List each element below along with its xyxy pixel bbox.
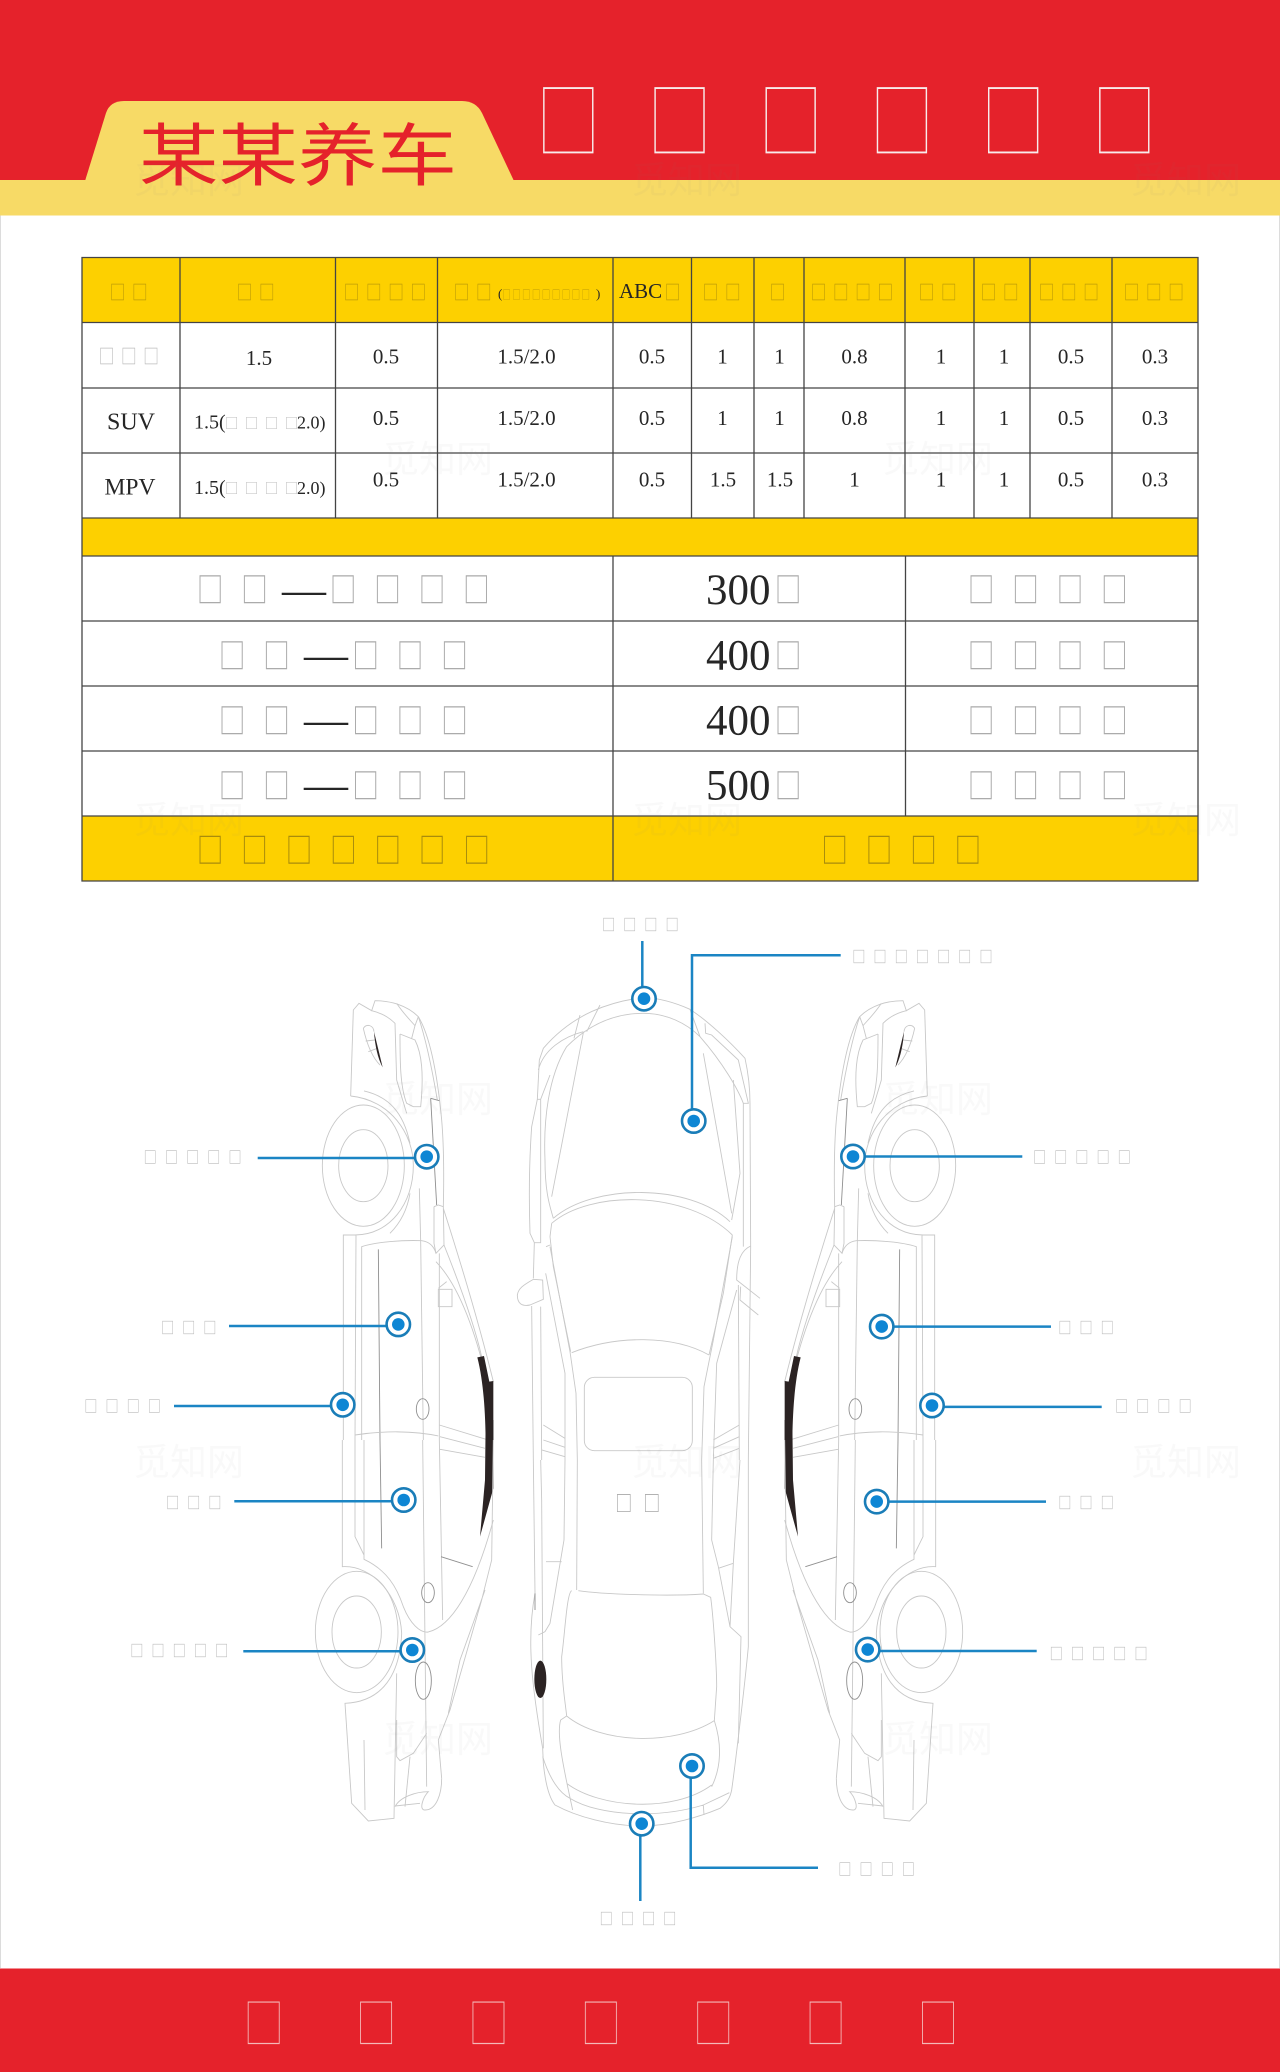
package row 2: 400 bbox=[706, 632, 770, 679]
callout: rear bumper bbox=[600, 1812, 684, 1930]
callout: hood bbox=[682, 945, 1001, 1133]
table row: sedan: 0.5 bbox=[373, 344, 399, 368]
header band bbox=[0, 0, 1280, 216]
footer slogan: □□□□□□□ bbox=[243, 1981, 1030, 2059]
callout: left front fender: □□□□□ bbox=[144, 1146, 250, 1169]
table row: SUV: 1 bbox=[999, 406, 1009, 430]
table footer row bbox=[197, 823, 999, 873]
table header row: □ bbox=[770, 277, 792, 306]
watermarks: 觅知网 bbox=[382, 439, 493, 480]
title: 某某养车 bbox=[139, 119, 457, 195]
table row: MPV: 0.5 bbox=[639, 468, 665, 492]
package row 3: □□□ bbox=[352, 693, 486, 743]
callout: right front door bbox=[870, 1315, 1122, 1339]
package row 2: □□ bbox=[219, 628, 308, 678]
table row: sedan: □□□ bbox=[99, 341, 166, 370]
watermarks: 觅知网 bbox=[133, 800, 244, 841]
table header row bbox=[110, 277, 1191, 306]
watermarks: 觅知网 bbox=[631, 160, 742, 201]
car centre label: □□ bbox=[615, 1486, 671, 1518]
callout: right rear door: □□□ bbox=[1058, 1491, 1122, 1514]
package row 3: — bbox=[303, 695, 349, 744]
table row: MPV: 1.5( bbox=[194, 477, 226, 499]
table header row: □□ bbox=[919, 277, 963, 306]
package row 1: □ bbox=[775, 562, 819, 613]
table row: MPV: 0.5 bbox=[1058, 468, 1084, 492]
watermarks: 觅知网 bbox=[382, 1719, 493, 1760]
package row 3: □ bbox=[775, 693, 819, 743]
package row 4: □□□□ bbox=[968, 758, 1146, 808]
watermarks: 觅知网 bbox=[882, 439, 993, 480]
right side view of car bbox=[785, 1001, 963, 1821]
table footer row: □□□□□□□ bbox=[197, 823, 508, 873]
callout: rear bumper: □□□□ bbox=[600, 1907, 684, 1930]
package row 1: □□□□ bbox=[330, 562, 508, 613]
table header row: ( bbox=[498, 286, 502, 301]
watermarks: 觅知网 bbox=[882, 1719, 993, 1760]
package row 1: — bbox=[281, 565, 327, 614]
callout: right sill bbox=[920, 1394, 1200, 1418]
callout: right rear door bbox=[865, 1490, 1122, 1514]
table header row: □□□□ bbox=[811, 277, 900, 306]
package row 4: — bbox=[303, 760, 349, 809]
watermarks: 觅知网 bbox=[631, 800, 742, 841]
callout: right front door: □□□ bbox=[1058, 1316, 1122, 1339]
table row: MPV: 0.3 bbox=[1142, 468, 1168, 492]
table row: MPV: 1.5/2.0 bbox=[497, 468, 556, 492]
callout: left rear fender: □□□□□ bbox=[130, 1639, 236, 1662]
table row: MPV: MPV bbox=[104, 474, 155, 500]
table row: sedan: 1 bbox=[774, 344, 785, 368]
package row 4: 500 bbox=[706, 762, 770, 809]
table row: SUV: 0.8 bbox=[841, 406, 868, 430]
table row: sedan: 1 bbox=[999, 344, 1009, 368]
package row 4: □□ bbox=[219, 758, 308, 808]
watermarks: 觅知网 bbox=[1130, 800, 1241, 841]
package row 1: □□□□ bbox=[968, 562, 1146, 613]
watermarks: 觅知网 bbox=[133, 160, 244, 201]
table grid bbox=[82, 258, 1198, 881]
watermarks: 觅知网 bbox=[882, 1079, 993, 1120]
table header row: □ bbox=[665, 277, 687, 306]
table footer row: □□□□ bbox=[821, 823, 999, 873]
callout: left front door bbox=[161, 1313, 410, 1339]
table row: SUV: 1 bbox=[717, 406, 728, 430]
table row: MPV: □□□□ bbox=[225, 478, 305, 499]
top view of car bbox=[517, 997, 760, 1826]
package row 2: — bbox=[303, 630, 349, 679]
table header row: □□ bbox=[237, 277, 281, 306]
watermarks: 觅知网 bbox=[133, 1442, 244, 1483]
table row: sedan: 0.5 bbox=[1058, 344, 1084, 368]
table row: SUV: □□□□ bbox=[225, 413, 305, 434]
table header row: □□□□□□□□□ bbox=[502, 285, 591, 303]
package row 1 bbox=[197, 562, 1146, 614]
table row: MPV: 1.5 bbox=[767, 468, 793, 492]
package row 3: 400 bbox=[706, 697, 770, 744]
left side view of car bbox=[315, 1001, 493, 1821]
table row: MPV: 2.0) bbox=[297, 478, 326, 499]
watermarks: 觅知网 bbox=[382, 1079, 493, 1120]
table row: MPV: 0.5 bbox=[373, 468, 399, 492]
table row: SUV: 0.5 bbox=[1058, 406, 1084, 430]
callout: hood: □□□□□□□ bbox=[852, 945, 1001, 968]
callout: left front fender bbox=[144, 1145, 438, 1169]
callout: trunk: □□□□ bbox=[838, 1857, 923, 1880]
table row: MPV bbox=[104, 468, 1168, 500]
table header row: □□ bbox=[110, 277, 154, 306]
table row: SUV: 1.5/2.0 bbox=[497, 406, 556, 430]
package row 3: □□ bbox=[219, 693, 308, 743]
table row: sedan: 0.8 bbox=[841, 344, 868, 368]
table row: SUV: 0.5 bbox=[639, 406, 665, 430]
table row: SUV: 1.5( bbox=[194, 412, 226, 434]
table row: sedan: 1.5 bbox=[246, 346, 272, 370]
package row 3: □□□□ bbox=[968, 693, 1146, 743]
table row: sedan: 1.5/2.0 bbox=[497, 344, 556, 368]
table row: SUV: 1 bbox=[936, 406, 946, 430]
package row 4: □ bbox=[775, 758, 819, 808]
package row 4: □□□ bbox=[352, 758, 486, 808]
table row: sedan: 1 bbox=[717, 344, 728, 368]
table row: MPV: 1 bbox=[849, 468, 860, 492]
table header row: □□ bbox=[454, 277, 498, 306]
table yellow rows bbox=[82, 258, 1198, 881]
package row 3 bbox=[219, 693, 1146, 744]
package row 1: 300 bbox=[706, 567, 770, 614]
table header row: □□□ bbox=[1039, 277, 1106, 306]
callout: left sill bbox=[84, 1393, 354, 1418]
package row 4 bbox=[219, 758, 1146, 809]
table row: MPV: 1 bbox=[999, 468, 1009, 492]
package row 1: □□ bbox=[197, 562, 286, 613]
table header row: □□□ bbox=[1124, 277, 1191, 306]
table header row: ABC bbox=[619, 279, 662, 303]
watermarks: 觅知网 bbox=[1130, 160, 1241, 201]
header brand tab bbox=[85, 101, 514, 181]
table row: SUV: 0.3 bbox=[1142, 406, 1168, 430]
watermarks: 觅知网 bbox=[1130, 1442, 1241, 1483]
car diagram bbox=[84, 913, 1200, 1930]
header slogan: □□□□□□ bbox=[536, 57, 1203, 177]
callout: right front fender: □□□□□ bbox=[1033, 1146, 1139, 1169]
callout: right sill: □□□□ bbox=[1115, 1395, 1200, 1418]
callout: trunk bbox=[680, 1754, 923, 1880]
table row: sedan bbox=[99, 341, 1168, 370]
footer band bbox=[0, 1968, 1280, 2072]
table row: MPV: 1.5 bbox=[710, 468, 736, 492]
table row: sedan: 0.3 bbox=[1142, 344, 1168, 368]
table header row: ) bbox=[596, 286, 600, 301]
callout: left front door: □□□ bbox=[161, 1316, 224, 1339]
table header row: □□ bbox=[703, 277, 747, 306]
price table bbox=[82, 258, 1198, 881]
callout: left rear door bbox=[166, 1488, 415, 1514]
table header row: □□ bbox=[981, 277, 1025, 306]
callout: top left label: □□□□ bbox=[602, 913, 687, 936]
table row: SUV: 2.0) bbox=[297, 412, 326, 434]
table header row: □□□□ bbox=[344, 277, 433, 306]
table row: MPV: 1 bbox=[936, 468, 946, 492]
package row 2: □□□□ bbox=[968, 628, 1146, 678]
callout: right front fender bbox=[841, 1145, 1139, 1169]
callout: top left label bbox=[602, 913, 687, 1010]
callout: left rear fender bbox=[130, 1638, 424, 1662]
package row 2: □□□ bbox=[352, 628, 486, 678]
package row 2: □ bbox=[775, 628, 819, 678]
package row 2 bbox=[219, 628, 1146, 679]
table row: SUV: 0.5 bbox=[373, 406, 399, 430]
table row: SUV: 1 bbox=[774, 406, 785, 430]
callout: right rear fender: □□□□□ bbox=[1050, 1642, 1156, 1665]
callout: left rear door: □□□ bbox=[166, 1491, 229, 1514]
watermarks: 觅知网 bbox=[631, 1442, 742, 1483]
watermarks bbox=[133, 160, 1241, 1760]
callout: right rear fender bbox=[856, 1638, 1156, 1665]
table row: sedan: 0.5 bbox=[639, 344, 665, 368]
table row: SUV bbox=[107, 406, 1168, 436]
table row: SUV: SUV bbox=[107, 410, 156, 436]
table row: sedan: 1 bbox=[936, 344, 946, 368]
callout: left sill: □□□□ bbox=[84, 1395, 169, 1418]
